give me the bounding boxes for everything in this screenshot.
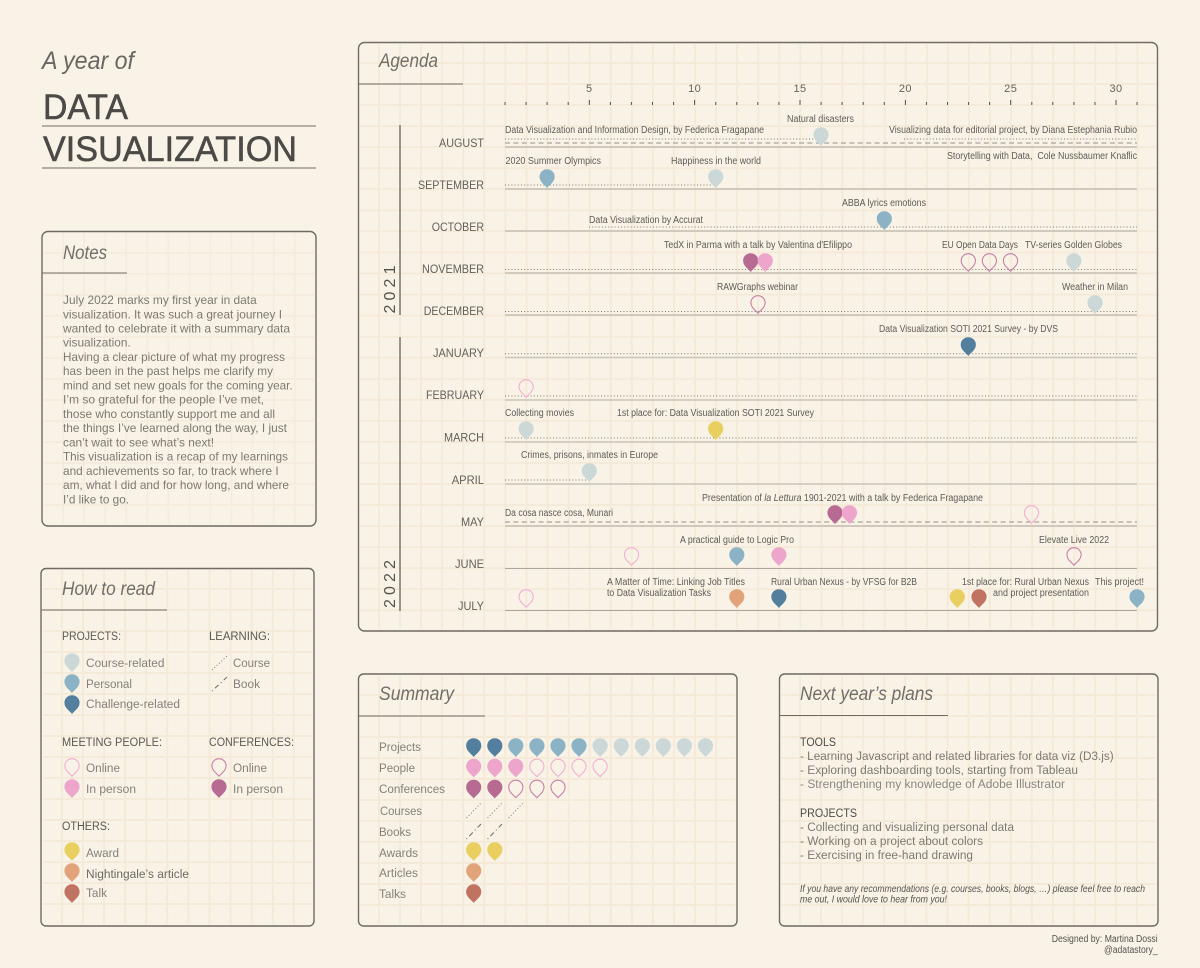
legend: meeting people xyxy=(62,735,162,798)
legend: others: Award xyxy=(86,846,119,860)
row: November: NOVEMBER xyxy=(422,262,484,276)
row: August: AUGUST xyxy=(439,136,484,150)
row: February xyxy=(426,380,1137,402)
credits: Designed by: Martina Dossi xyxy=(1052,934,1158,945)
text block: notes body: mind and set new goals for the coming year. xyxy=(63,378,293,392)
row: January: Data Visualization SOTI 2021 Survey - by DVS xyxy=(879,324,1058,335)
summary row: conferences: Conferences xyxy=(379,782,445,796)
row: July: 1st place for: Rural Urban Nexus xyxy=(962,577,1089,588)
text block: notes body: wanted to celebrate it with a summary data xyxy=(62,322,290,336)
axis: days of month: 20 xyxy=(899,83,912,95)
row: September: 2020 Summer Olympics xyxy=(506,156,601,167)
summary row: projects xyxy=(379,738,713,757)
row: December: RAWGraphs webinar xyxy=(717,282,799,293)
text block: notes body: those who constantly support me and all xyxy=(63,407,275,421)
credits xyxy=(1052,934,1158,956)
legend: projects xyxy=(62,629,180,714)
summary row: talks: Talks xyxy=(379,887,406,901)
legend: others: Nightingale’s article xyxy=(86,867,189,881)
row: March xyxy=(444,408,1137,444)
row: August: Visualizing data for editorial project, by Diana Estephania Rubio xyxy=(889,125,1137,136)
text block: projects: - Working on a project about colors xyxy=(800,834,983,848)
panel: how to read xyxy=(41,568,314,926)
row: July: JULY xyxy=(458,599,484,613)
summary row: courses xyxy=(380,803,523,818)
summary row: books xyxy=(379,824,502,839)
row: October: OCTOBER xyxy=(432,220,484,234)
row: November: TV-series Golden Globes xyxy=(1025,240,1122,251)
row: June: Elevate Live 2022 xyxy=(1039,535,1109,546)
panel: notes xyxy=(42,232,316,526)
heading: next year's plans: Next year’s plans xyxy=(800,684,933,705)
summary row: talks xyxy=(379,884,481,903)
subtitle: A year of: A year of xyxy=(40,47,137,75)
row: September xyxy=(418,151,1137,192)
year marker: 2021: 2021 xyxy=(382,265,399,314)
heading: notes: Notes xyxy=(63,243,107,264)
legend: conferences xyxy=(209,735,294,798)
text block: tools: - Strengthening my knowledge of Adobe Illustrator xyxy=(800,777,1065,791)
row: October: ABBA lyrics emotions xyxy=(842,198,926,209)
text block: projects: PROJECTS xyxy=(800,806,857,820)
panel: summary xyxy=(358,674,737,926)
summary row: people: People xyxy=(379,761,415,775)
text block: tools: TOOLS xyxy=(800,735,836,749)
row: July: Rural Urban Nexus - by VFSG for B2B xyxy=(771,577,917,588)
summary row: awards: Awards xyxy=(379,846,418,860)
row: October xyxy=(432,198,1137,234)
row: November: TedX in Parma with a talk by Valentina d'Efilippo xyxy=(664,240,852,251)
axis: days of month: 5 xyxy=(586,83,593,95)
row: September: Happiness in the world xyxy=(671,156,761,167)
row: March: MARCH xyxy=(444,430,484,444)
legend: meeting people: Online xyxy=(86,761,120,775)
text block: notes body: the things I’ve learned along the way, I just xyxy=(63,421,288,435)
legend: projects: Challenge-related xyxy=(86,697,180,711)
row: September: Storytelling with Data, Cole Nussbaumer Knaflic xyxy=(947,151,1137,162)
title xyxy=(40,47,316,169)
text block: recommendation note: If you have any recommendations (e.g. courses, books, blogs, …) please feel free to reach xyxy=(800,884,1145,895)
summary row: books: Books xyxy=(379,825,411,839)
row: January xyxy=(433,324,1137,360)
row: May xyxy=(461,493,1137,529)
row: July: A Matter of Time: Linking Job Titles xyxy=(607,577,745,588)
row: April xyxy=(452,450,1137,487)
legend: projects: Personal xyxy=(86,677,132,691)
text block: notes body: I’d like to go. xyxy=(63,492,129,506)
row: December: Weather in Milan xyxy=(1062,282,1128,293)
summary row: courses: Courses xyxy=(380,804,422,818)
text block: notes body: visualization. It was such a great journey I xyxy=(63,307,282,321)
legend: projects: PROJECTS: xyxy=(62,629,121,643)
text block: tools: - Learning Javascript and related libraries for data viz (D3.js) xyxy=(800,749,1114,763)
text block: notes body: I’m so grateful for the people I’ve met, xyxy=(63,393,264,407)
text block: tools xyxy=(800,735,1114,791)
row: May: Da cosa nasce cosa, Munari xyxy=(505,508,613,519)
row: July xyxy=(458,577,1145,613)
summary row: articles xyxy=(379,863,481,882)
legend: conferences: CONFERENCES: xyxy=(209,735,294,749)
summary row: people xyxy=(379,759,607,778)
text block: notes body: has been in the past helps me clarify my xyxy=(63,364,273,378)
year marker: 2022: 2022 xyxy=(382,560,399,608)
text block: notes body: July 2022 marks my first year in data xyxy=(63,293,257,307)
axis: days of month: 10 xyxy=(688,83,701,95)
row: May: Presentation of la Lettura 1901-2021 with a talk by Federica Fragapane xyxy=(702,493,983,504)
row: November xyxy=(422,240,1137,276)
row: July: to Data Visualization Tasks xyxy=(607,588,711,599)
legend: learning: Book xyxy=(233,677,261,691)
row: October: Data Visualization by Accurat xyxy=(589,215,703,226)
row: June xyxy=(455,535,1137,571)
row: April: APRIL xyxy=(452,473,484,487)
legend: others: Talk xyxy=(86,886,108,900)
row: August xyxy=(439,114,1137,150)
legend: learning: Course xyxy=(233,656,270,670)
heading: how to read: How to read xyxy=(62,579,156,600)
axis: days of month: 30 xyxy=(1109,83,1123,95)
text block: projects xyxy=(800,806,1014,862)
text block: recommendation note: me out, I would love to hear from you! xyxy=(800,894,947,906)
summary row: awards xyxy=(379,842,502,861)
row: January: JANUARY xyxy=(433,346,484,360)
text block: projects: - Exercising in free-hand drawing xyxy=(800,848,973,862)
row: June: A practical guide to Logic Pro xyxy=(680,535,794,546)
credits: @adatastory_ xyxy=(1104,945,1158,956)
text block: notes body: Having a clear picture of what my progress xyxy=(63,350,285,364)
axis: days of month: 15 xyxy=(793,83,807,95)
row: May: MAY xyxy=(461,515,484,529)
heading: agenda: Agenda xyxy=(378,51,438,72)
text block: tools: - Exploring dashboarding tools, starting from Tableau xyxy=(800,763,1078,777)
text block: notes body: This visualization is a recap of my learnings xyxy=(63,450,288,464)
axis: days of month xyxy=(505,83,1137,105)
row: November: EU Open Data Days xyxy=(942,240,1018,251)
row: August: Natural disasters xyxy=(787,114,854,125)
legend: learning: LEARNING: xyxy=(209,629,270,643)
text block: projects: - Collecting and visualizing personal data xyxy=(800,820,1014,834)
text block: notes body: and achievements so far, to track where I xyxy=(63,464,279,478)
heading: summary: Summary xyxy=(379,684,455,705)
row: August: Data Visualization and Information Design, by Federica Fragapane xyxy=(505,125,764,136)
text block: notes body: can’t wait to see what’s next! xyxy=(63,435,214,449)
row: February: FEBRUARY xyxy=(426,388,484,402)
text block: notes body: am, what I did and for how long, and where xyxy=(63,478,289,492)
text block: notes body xyxy=(62,293,293,506)
legend: learning xyxy=(209,629,270,691)
row: December xyxy=(424,282,1137,318)
legend: conferences: Online xyxy=(233,761,267,775)
legend: others: OTHERS: xyxy=(62,819,110,833)
row: March: 1st place for: Data Visualization SOTI 2021 Survey xyxy=(617,408,814,419)
row: March: Collecting movies xyxy=(505,408,574,419)
panel: next year's plans xyxy=(779,674,1158,926)
summary row: conferences xyxy=(379,780,565,798)
row: December: DECEMBER xyxy=(424,304,484,318)
legend: others xyxy=(62,819,189,903)
legend: projects: Course-related xyxy=(86,656,164,670)
heading: VISUALIZATION: VISUALIZATION xyxy=(43,130,297,169)
row: September: SEPTEMBER xyxy=(418,178,484,192)
row: April: Crimes, prisons, inmates in Europe xyxy=(521,450,658,461)
text block: recommendation note xyxy=(800,884,1145,906)
row: July: and project presentation xyxy=(993,588,1089,599)
text block: notes body: visualization. xyxy=(63,336,131,350)
heading: DATA: DATA xyxy=(43,88,129,127)
summary row: articles: Articles xyxy=(379,866,418,880)
panel: agenda xyxy=(358,42,1158,631)
row: July: This project! xyxy=(1095,577,1144,588)
legend: meeting people: MEETING PEOPLE: xyxy=(62,735,162,749)
legend: meeting people: In person xyxy=(86,782,136,796)
axis: days of month: 25 xyxy=(1004,83,1017,95)
legend: conferences: In person xyxy=(233,782,283,796)
summary row: projects: Projects xyxy=(379,740,421,754)
row: June: JUNE xyxy=(455,557,484,571)
